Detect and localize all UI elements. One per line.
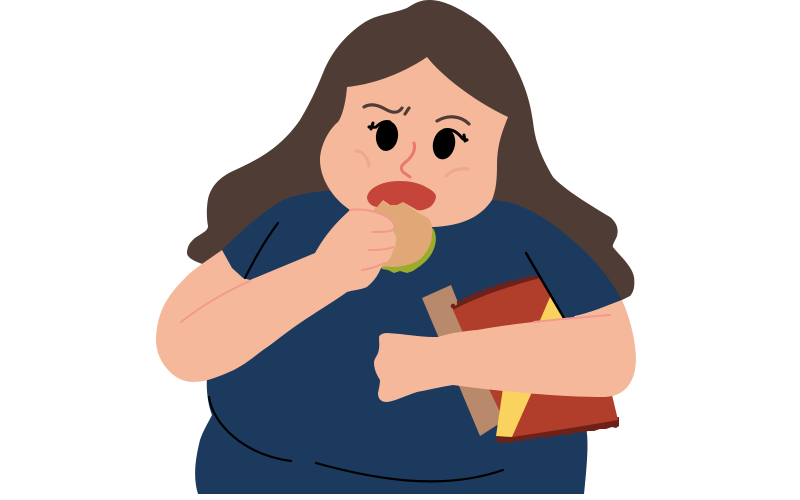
belly crease lines — [209, 397, 503, 481]
nose — [401, 143, 415, 177]
sleeve crease — [245, 223, 278, 278]
left eyebrow — [364, 105, 409, 114]
raised arm and hand — [156, 209, 396, 382]
crease line by bag — [526, 253, 564, 318]
hand finger lines — [350, 209, 394, 232]
right eye — [430, 127, 467, 161]
navy shirt body — [195, 190, 622, 494]
arm crease — [181, 281, 250, 322]
mouth — [367, 181, 436, 210]
burger — [362, 200, 436, 273]
chip bag crimp bottom — [496, 417, 619, 444]
cheek marks — [356, 151, 468, 176]
face — [320, 57, 508, 227]
snack box — [422, 285, 505, 436]
chip bag crimp top — [452, 276, 545, 314]
chip bag yellow stripe — [496, 297, 563, 437]
hair — [187, 0, 634, 300]
lower arm hugging bag — [374, 300, 636, 402]
chip bag — [452, 276, 619, 444]
right eyebrow — [437, 117, 469, 124]
left eye — [369, 120, 400, 152]
